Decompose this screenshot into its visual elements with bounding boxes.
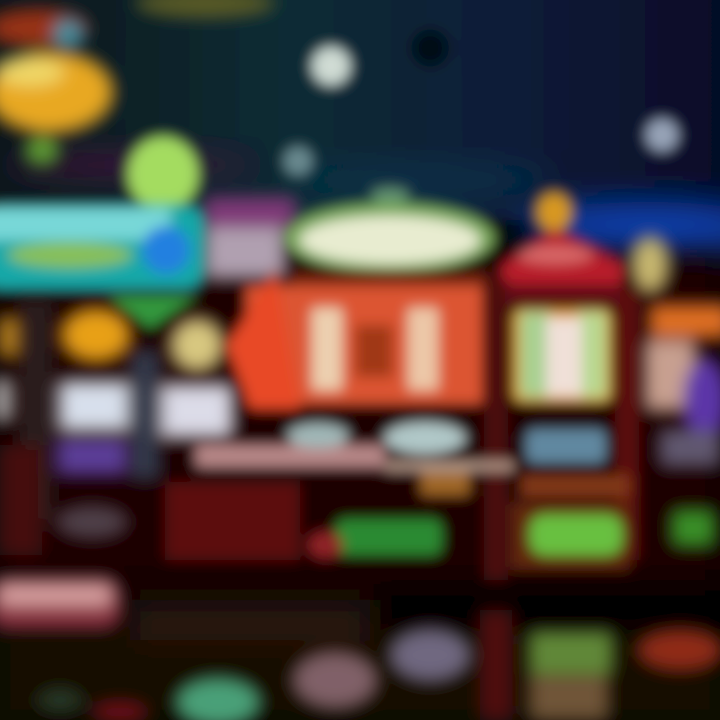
top left neon sign (0, 10, 112, 164)
right slot machine window (512, 308, 612, 403)
dark red pillars (484, 280, 639, 580)
lower cabinets (165, 482, 630, 570)
floor reflections (36, 610, 720, 720)
purple band behind sign (205, 198, 295, 278)
cyan sign (0, 205, 205, 330)
top centre glow (135, 0, 275, 17)
lower left counter (0, 578, 120, 628)
right slot machine header (500, 192, 625, 295)
far right machine (632, 237, 720, 546)
stars (283, 30, 679, 176)
green globe (127, 136, 199, 212)
left machines (0, 300, 232, 555)
central dome roof (284, 187, 496, 274)
central orange machine (225, 270, 490, 410)
floor and lower dark area (0, 260, 720, 720)
counter row of panels (195, 421, 630, 498)
